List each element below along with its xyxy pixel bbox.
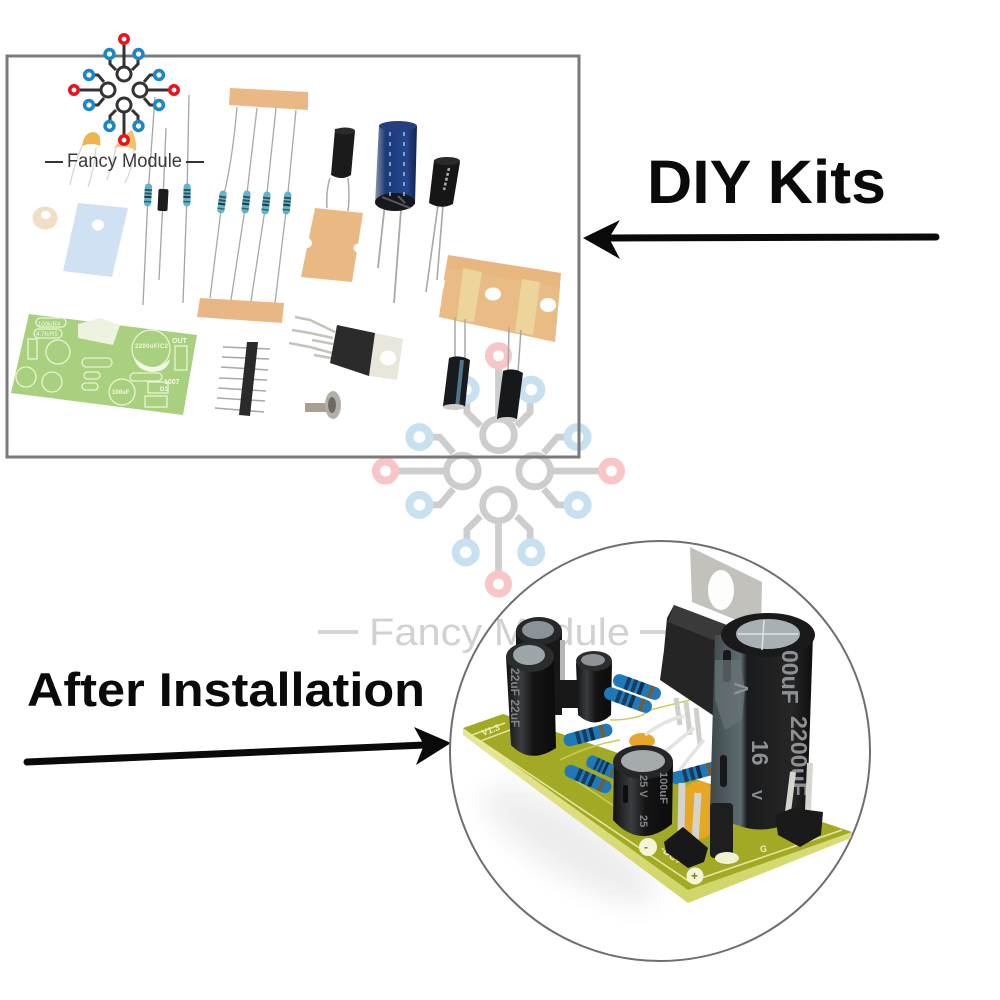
TO-220 amplifier chip xyxy=(289,317,403,380)
washer xyxy=(32,206,58,230)
small black capacitor on tape xyxy=(301,128,363,282)
100uF capacitor: 25 V xyxy=(637,775,649,798)
thermal pad xyxy=(63,203,128,277)
pair of taped capacitors xyxy=(443,317,523,423)
bare circuit board: 100uF xyxy=(112,390,130,396)
heading: DIY Kits: DIY Kits xyxy=(647,148,886,216)
arrow to kit panel xyxy=(583,220,936,259)
watermark: Fancy Module logo xyxy=(318,346,680,654)
panel: DIY kit parts frame xyxy=(7,35,579,457)
large taped strip xyxy=(439,255,561,342)
logo: Fancy Module xyxy=(45,35,204,172)
black capacitor xyxy=(426,157,460,292)
TO-220 amplifier chip xyxy=(645,547,762,770)
circuit board: + xyxy=(691,869,698,883)
100uF capacitor: 25 xyxy=(637,815,649,827)
assembled amplifier module xyxy=(463,547,852,923)
bare circuit board xyxy=(11,314,197,415)
2200uF capacitor: V xyxy=(732,682,753,695)
2200uF capacitor: 2200uF xyxy=(786,716,812,796)
2200uF capacitor: 00uF xyxy=(777,650,803,704)
2200uF capacitor xyxy=(710,613,815,830)
loose resistors and diode xyxy=(143,95,191,305)
screw xyxy=(305,391,341,419)
bare circuit board: 4.7K/R5 xyxy=(36,332,58,338)
2200uF capacitor: V xyxy=(748,790,765,800)
heading: After Installation: After Installation xyxy=(27,663,425,716)
small capacitor xyxy=(558,640,612,722)
bare circuit board: D1 xyxy=(160,387,168,393)
circuit board xyxy=(463,700,852,903)
pin headers and diode xyxy=(664,763,823,868)
100uF capacitor: 100uF xyxy=(657,772,669,804)
bare circuit board: 100k/R4 xyxy=(38,322,61,328)
board shadow xyxy=(469,767,671,923)
22uF capacitor: 22uF 22uF xyxy=(508,668,522,727)
logo: Fancy Module: Fancy Module xyxy=(67,151,182,172)
back capacitor xyxy=(516,617,562,715)
2200uF capacitor: 16 xyxy=(747,740,773,766)
100uF capacitor xyxy=(613,745,673,836)
circuit board: G xyxy=(760,844,767,854)
bare circuit board: 2200uF/C2 xyxy=(135,344,169,350)
blue electrolytic capacitor xyxy=(375,121,417,303)
circuit board: - xyxy=(644,840,648,854)
callout: magnified circle xyxy=(450,541,870,961)
circuit board: V1.3 xyxy=(480,722,501,738)
resistor strip with tapes xyxy=(197,88,308,323)
ceramic capacitors xyxy=(70,130,136,187)
circuit board: -DC+ xyxy=(658,844,683,868)
22uF capacitor xyxy=(506,642,556,756)
bare circuit board: OUT xyxy=(172,338,188,345)
bare circuit board: 1007 xyxy=(164,379,180,386)
blue resistors xyxy=(562,672,721,795)
yellow capacitors xyxy=(629,733,720,839)
watermark: Fancy Module logo: Fancy Module xyxy=(369,612,630,654)
arrow to installed module xyxy=(27,727,451,765)
pin header xyxy=(215,342,270,416)
